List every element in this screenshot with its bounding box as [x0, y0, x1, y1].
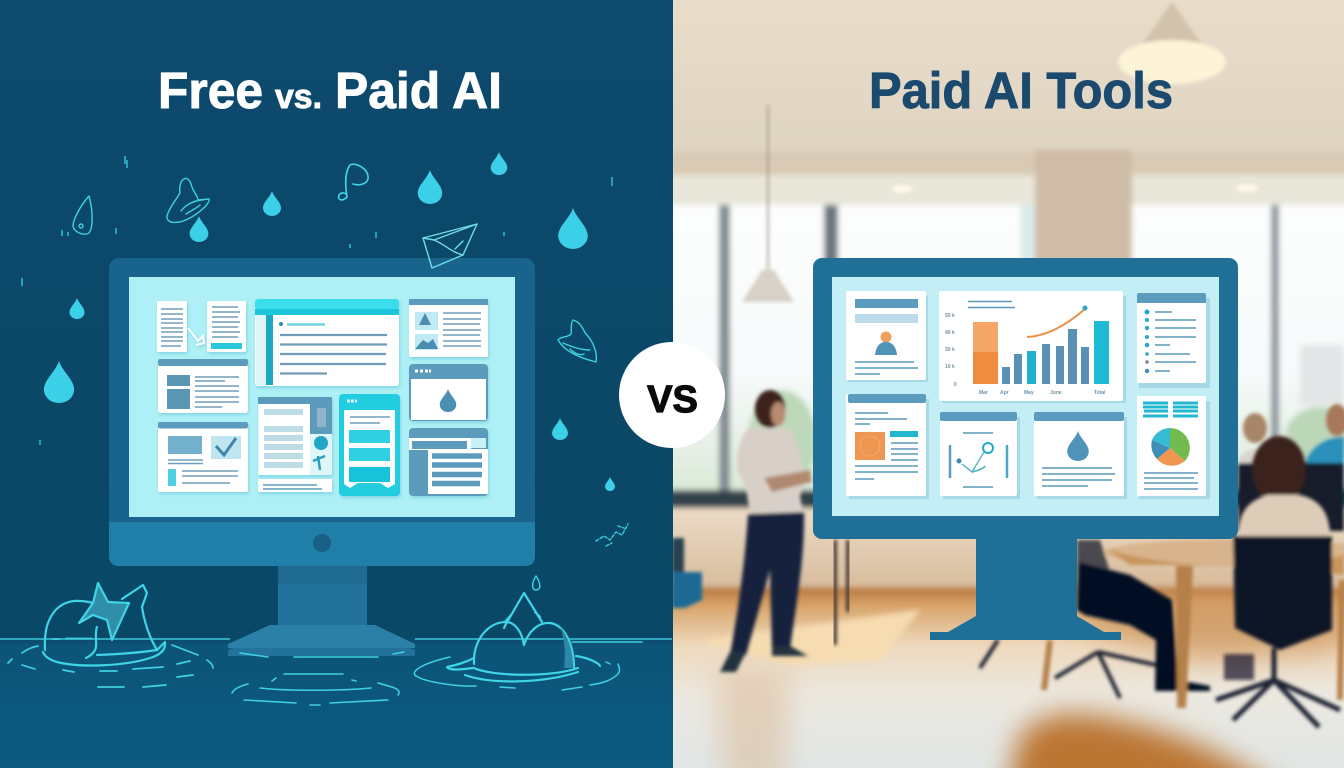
title: Free vs. Paid AI: vs.	[275, 78, 322, 116]
chart bottom labels: Total	[1094, 390, 1106, 396]
monitor: free tools	[109, 258, 535, 656]
card: checkmark panel	[158, 422, 248, 492]
background people	[1238, 404, 1344, 531]
monitor stand	[930, 538, 1121, 640]
chart bars	[973, 321, 1109, 384]
card: bar chart	[939, 291, 1126, 403]
monitor bezel	[109, 258, 535, 566]
card: water drop	[1034, 412, 1127, 499]
title: Paid AI Tools: Paid AI Tools	[869, 62, 1173, 119]
monitor stand	[228, 566, 415, 656]
chart bottom labels: May	[1024, 390, 1034, 396]
card: profile	[846, 291, 928, 382]
floor	[650, 587, 1344, 768]
chart bottom labels: June	[1050, 390, 1062, 396]
monitor button	[313, 534, 331, 552]
vs badge	[619, 342, 725, 448]
card: magnifier chart	[940, 412, 1020, 499]
floor wood reflection	[1005, 714, 1290, 768]
horizon line	[0, 638, 672, 640]
ceiling	[673, 0, 1344, 157]
card: pie chart	[1137, 396, 1210, 499]
icon: outlined music note	[339, 164, 368, 200]
monitor bezel	[813, 258, 1238, 539]
chart axis labels: 10 k	[945, 364, 955, 370]
card: window with drop	[409, 364, 488, 421]
icon: outlined paper boat	[423, 224, 477, 268]
meeting table and seated people	[980, 436, 1344, 727]
card: layered lists	[409, 428, 488, 496]
monitor chin	[109, 522, 535, 566]
background: blurred office scene	[650, 0, 1344, 768]
title: Free vs. Paid AI	[158, 62, 502, 119]
title: Free vs. Paid AI: Free	[158, 62, 263, 119]
icons: falling water drops	[22, 152, 615, 491]
icon: squiggle	[596, 524, 628, 546]
lower wall	[650, 506, 1344, 588]
ceiling lamp	[1118, 2, 1226, 84]
chart axis labels: 40 k	[945, 330, 955, 336]
floor reflection under woman	[715, 670, 790, 768]
ceiling spots	[892, 184, 1258, 193]
panel: free AI tools (left)	[0, 0, 673, 768]
dashboard cards: paid tools	[846, 291, 1210, 499]
pie chart	[1151, 428, 1190, 466]
chart bottom labels: Mar	[979, 390, 988, 396]
card: text with images	[158, 359, 248, 413]
windows	[650, 205, 1344, 490]
chart axis labels	[945, 313, 957, 388]
card: article column	[258, 397, 332, 492]
icon: outlined bell right	[558, 320, 596, 362]
side table legs	[835, 540, 848, 645]
chart trend line	[1027, 306, 1088, 337]
chart axis labels: 0	[954, 382, 957, 388]
title: Free vs. Paid AI: Paid AI	[335, 62, 502, 119]
icon: outlined bell	[167, 178, 209, 222]
counter	[650, 490, 820, 508]
card: teal phone list	[339, 394, 400, 496]
pendant lamp	[742, 105, 794, 302]
chart bottom labels	[979, 390, 1106, 396]
soffit and column	[673, 148, 1344, 258]
card: image list	[409, 299, 488, 357]
sketch: ripples under stand	[232, 652, 404, 705]
card: main window	[255, 299, 399, 386]
left chair	[672, 538, 702, 608]
icon: outlined teardrop	[73, 196, 92, 234]
sketch: mound in water	[414, 576, 642, 690]
chart axis labels: 50 k	[945, 313, 955, 319]
dashboard cards: free tools	[157, 299, 488, 496]
standing woman	[720, 390, 812, 672]
card: document pair	[157, 301, 246, 352]
vs label: VS	[647, 379, 698, 421]
card: report	[846, 394, 929, 499]
panel: paid AI tools (right)	[650, 0, 1344, 768]
chart axis labels: 30 k	[945, 347, 955, 353]
card: checklist	[1137, 293, 1210, 388]
chart bottom labels: Apr	[1000, 390, 1009, 396]
monitor screen	[832, 277, 1219, 516]
floor sunlight	[700, 610, 920, 665]
floor edge brown	[1090, 600, 1344, 660]
monitor: paid tools	[813, 258, 1238, 640]
sketch: tent and star in water	[8, 583, 213, 687]
monitor screen	[129, 277, 515, 517]
